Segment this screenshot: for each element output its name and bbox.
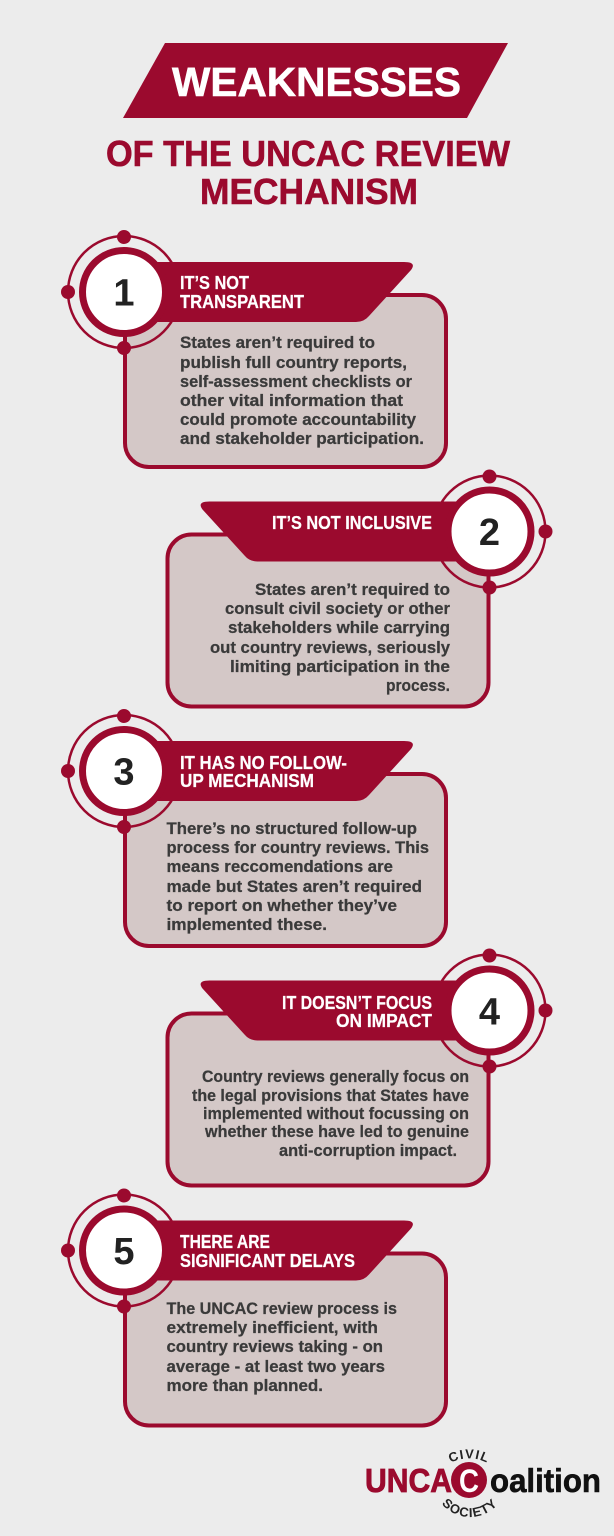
card and badge shapes 1 [61, 230, 446, 467]
heading 5: SIGNIFICANT DELAYS [180, 1250, 355, 1271]
heading 1: IT’S NOT [180, 272, 250, 293]
body text 1: States aren’t required to [180, 333, 375, 352]
number 5: 5 [113, 1231, 135, 1273]
body text 3 [166, 819, 429, 934]
body text 3: means reccomendations are [166, 857, 393, 876]
card and badge shapes 3 [61, 709, 446, 946]
number 1: 1 [113, 272, 135, 314]
heading 5: THERE ARE [180, 1231, 270, 1252]
heading 4 [282, 992, 433, 1031]
heading 4: ON IMPACT [336, 1010, 433, 1031]
heading 1 [180, 272, 305, 312]
number 4: 4 [479, 992, 500, 1034]
body text 5: country reviews taking - on [166, 1337, 383, 1356]
panel 3: no follow-up mechanism [61, 709, 446, 946]
body text 3: There’s no structured follow-up [166, 819, 417, 838]
body text 3: to report on whether they’ve [166, 896, 397, 915]
card and badge shapes 4 [168, 948, 552, 1186]
body text 4: implemented without focussing on [203, 1104, 469, 1123]
subtitle heading [106, 133, 510, 212]
body text 3: made but States aren’t required [166, 877, 422, 896]
body text 4: whether these have led to genuine [204, 1122, 469, 1141]
title banner: WEAKNESSES: WEAKNESSES [172, 59, 461, 105]
logo: UNCAC Coalition: oalition [490, 1462, 601, 1499]
panel 2: it's not inclusive [168, 470, 552, 706]
heading 4: IT DOESN’T FOCUS [282, 992, 432, 1013]
subtitle heading: MECHANISM [200, 171, 418, 212]
body text 1: could promote accountability [180, 410, 417, 429]
body text 4: the legal provisions that States have [192, 1086, 469, 1105]
number 3: 3 [113, 752, 135, 794]
heading 5 [180, 1231, 355, 1271]
heading 3 [180, 752, 347, 791]
body text 2: limiting participation in the [230, 657, 450, 676]
panel 4: doesn't focus on impact [168, 948, 552, 1186]
body text 1: publish full country reports, [180, 353, 407, 372]
body text 3: implemented these. [166, 915, 327, 934]
number 2: 2 [479, 512, 500, 554]
body text 2: stakeholders while carrying [228, 618, 450, 637]
logo: UNCAC Coalition: C [459, 1463, 479, 1499]
body text 1 [180, 333, 424, 448]
subtitle heading: OF THE UNCAC REVIEW [106, 133, 510, 174]
body text 5: extremely inefficient, with [166, 1318, 378, 1337]
title banner: WEAKNESSES [123, 43, 508, 118]
body text 5 [166, 1299, 397, 1395]
body text 5: more than planned. [166, 1376, 323, 1395]
body text 2: States aren’t required to [255, 580, 450, 599]
body text 2: process. [386, 676, 450, 695]
logo: UNCAC Coalition [365, 1449, 601, 1518]
panel 5: significant delays [61, 1188, 446, 1426]
body text 5: average - at least two years [166, 1357, 385, 1376]
heading 3: UP MECHANISM [180, 770, 314, 791]
body text 4: anti-corruption impact. [279, 1141, 457, 1160]
body text 1: self-assessment checklists or [180, 372, 413, 391]
body text 5: The UNCAC review process is [166, 1299, 397, 1318]
panel 1: it's not transparent [61, 230, 446, 467]
card and badge shapes 2 [168, 470, 552, 706]
body text 1: other vital information that [180, 391, 403, 410]
body text 2: out country reviews, seriously [210, 638, 451, 657]
logo: UNCAC Coalition: UNCA [365, 1462, 452, 1499]
logo: UNCAC Coalition: CIVIL [448, 1449, 487, 1462]
body text 2: consult civil society or other [225, 599, 451, 618]
body text 2 [210, 580, 451, 695]
body text 4 [192, 1067, 469, 1160]
body text 4: Country reviews generally focus on [202, 1067, 469, 1086]
body text 1: and stakeholder participation. [180, 429, 424, 448]
heading 2: IT’S NOT INCLUSIVE [272, 512, 432, 533]
heading 1: TRANSPARENT [180, 291, 305, 312]
logo: UNCAC Coalition: SOCIETY [442, 1498, 495, 1518]
body text 3: process for country reviews. This [166, 838, 429, 857]
heading 3: IT HAS NO FOLLOW- [180, 752, 347, 773]
card and badge shapes 5 [61, 1188, 446, 1426]
